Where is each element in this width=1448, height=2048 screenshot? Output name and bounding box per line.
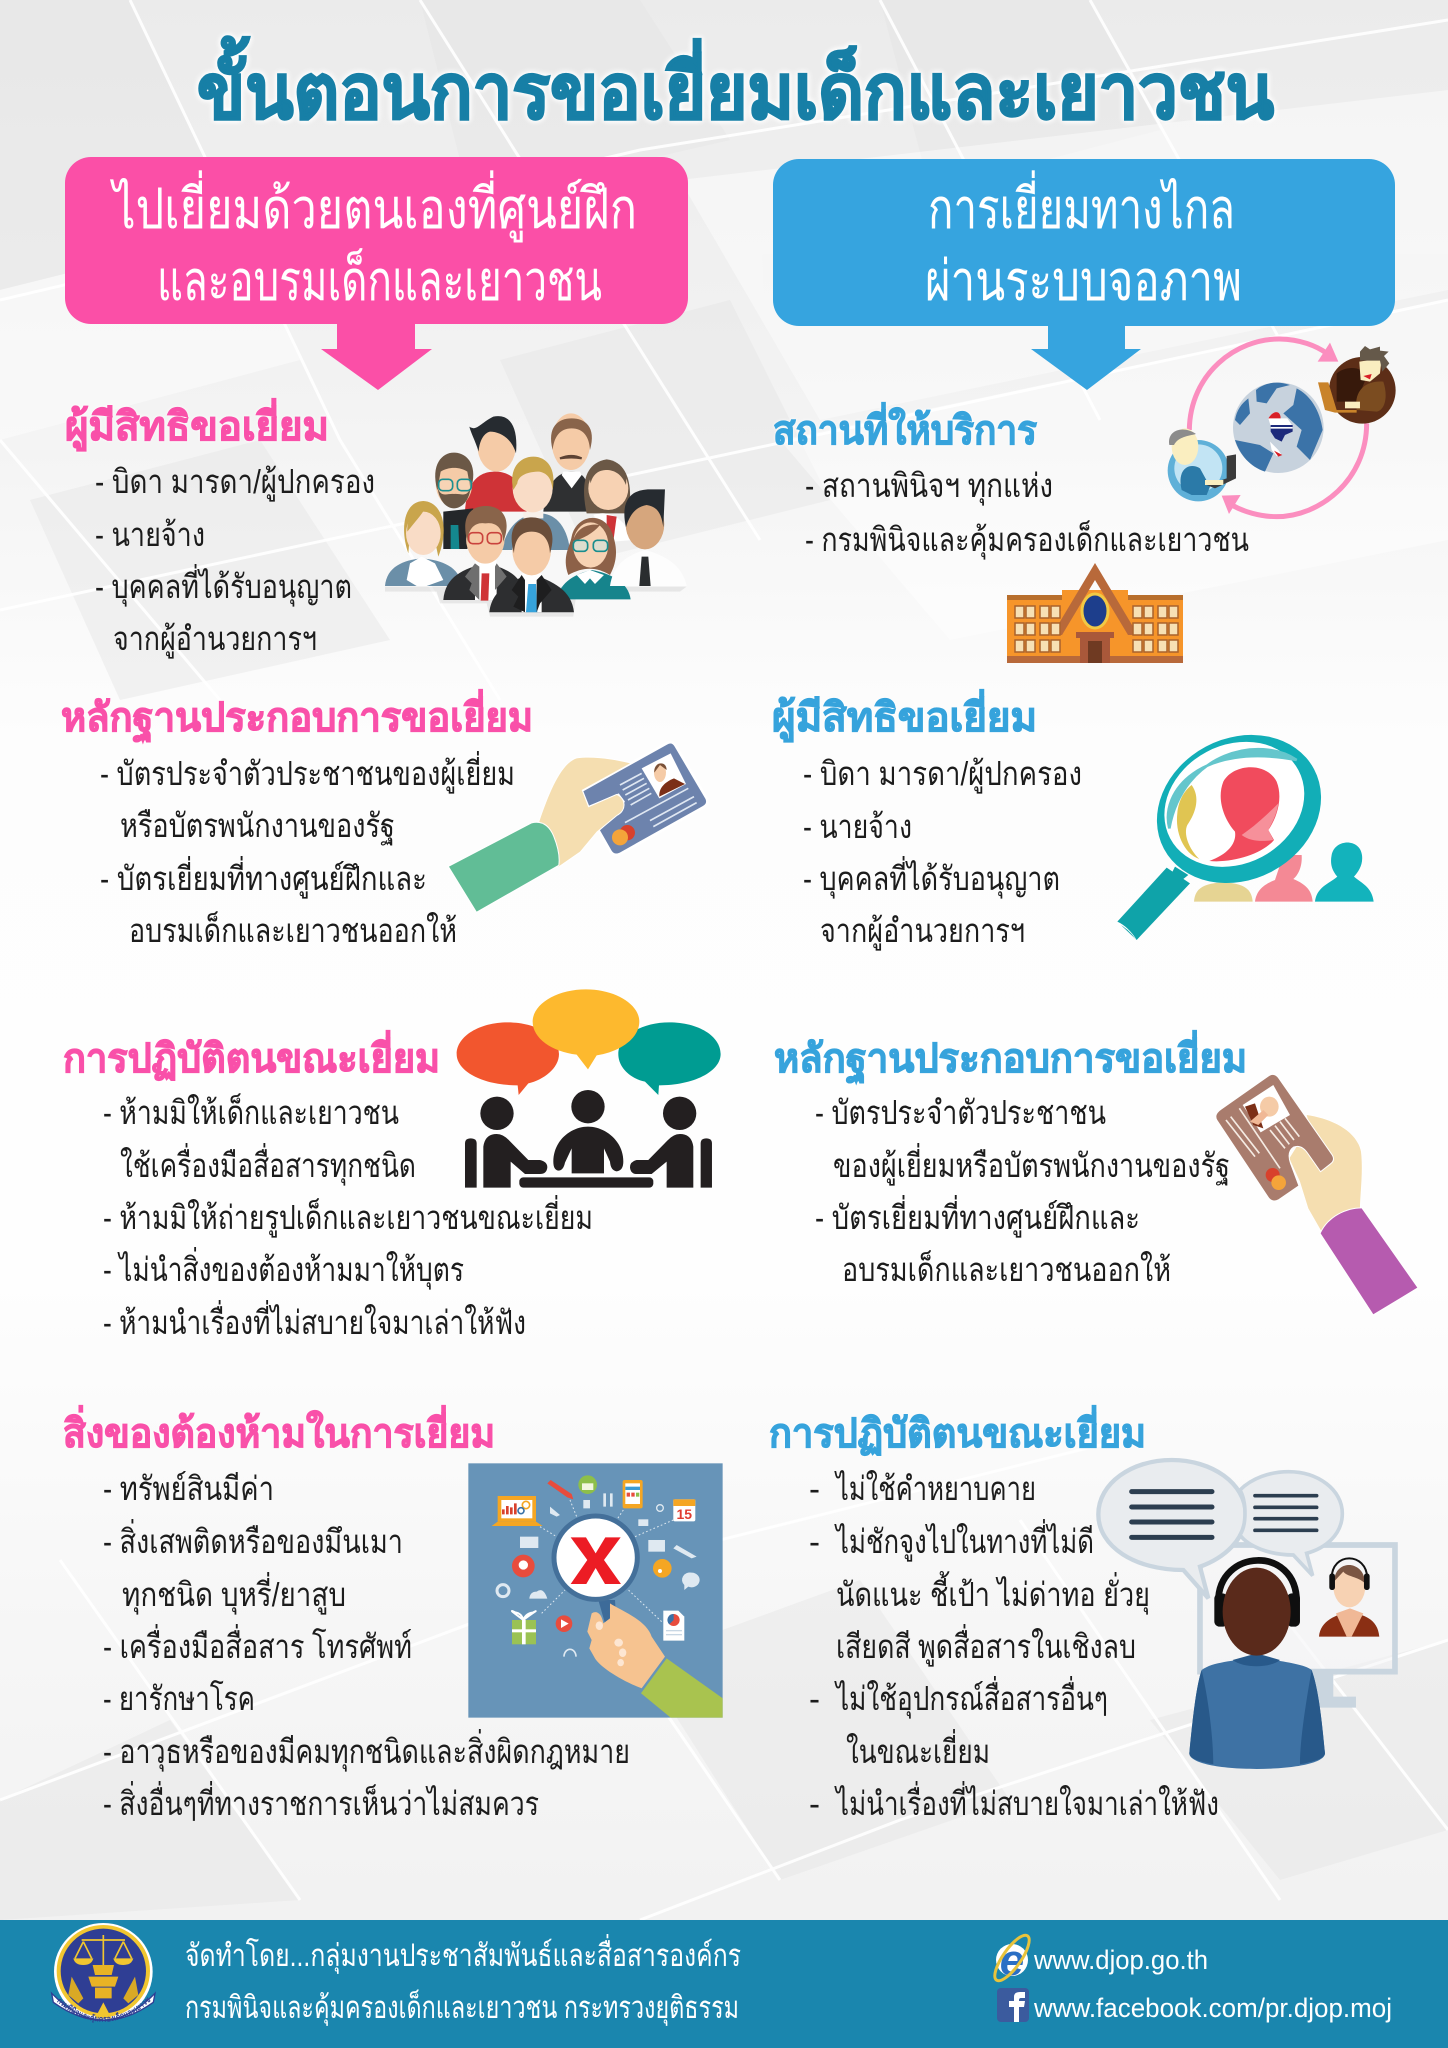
footer organisation text: กรมพินิจและคุ้มครองเด็กและเยาวชน กระทรวงยุติธรรม <box>185 1989 739 2027</box>
title: ขั้นตอนการขอเยี่ยมเด็กและเยาวชน <box>197 36 1274 135</box>
icon: internet <box>989 1931 1035 1985</box>
sleeve <box>449 823 559 912</box>
list: - สิ่งอื่นๆที่ทางราชการเห็นว่าไม่สมควร <box>103 1781 539 1822</box>
icon: group of people <box>385 413 687 617</box>
small icons <box>497 1493 700 1657</box>
heading: หลักฐานประกอบการขอเยี่ยม <box>61 689 533 744</box>
play <box>556 1615 572 1632</box>
list: ไม่ใช้คำหยาบคาย <box>834 1470 1036 1507</box>
section: conduct during visit (in person) <box>63 1030 593 1341</box>
person body <box>1189 1657 1325 1769</box>
icon: building <box>1007 563 1183 663</box>
list: ไม่ใช้อุปกรณ์สื่อสารอื่นๆ <box>834 1676 1108 1719</box>
tablet <box>623 1480 643 1508</box>
list: - บิดา มารดา/ผู้ปกครอง <box>95 463 375 502</box>
basket <box>578 1475 597 1494</box>
blue box text: ผ่านระบบจอภาพ <box>925 249 1242 312</box>
blue box text: การเยี่ยมทางไกล <box>928 170 1235 240</box>
X mark <box>571 1537 621 1584</box>
rss <box>653 1559 672 1578</box>
pink box text: และอบรมเด็กและเยาวชน <box>157 247 602 312</box>
people <box>465 1090 712 1188</box>
blue box with arrow <box>773 159 1395 390</box>
icon: meeting with speech bubbles <box>457 989 721 1188</box>
pencil <box>547 1480 573 1499</box>
head and headset <box>1218 1560 1297 1602</box>
pink box with arrow <box>65 157 688 390</box>
pink arrows <box>1189 339 1367 517</box>
card <box>582 742 707 855</box>
list: - ยารักษาโรค <box>103 1680 255 1717</box>
man right <box>1329 357 1396 424</box>
icon: facebook <box>997 1988 1029 2022</box>
section: eligible visitors (remote) <box>772 689 1082 951</box>
heading: การปฏิบัติตนขณะเยี่ยม <box>63 1030 440 1081</box>
list: เสียดสี พูดสื่อสารในเชิงลบ <box>836 1624 1136 1667</box>
list: - บุคคลที่ได้รับอนุญาต <box>803 856 1060 899</box>
list: จากผู้อำนวยการฯ <box>113 620 317 659</box>
list: - <box>809 1470 820 1507</box>
gift <box>512 1620 536 1644</box>
list: ทุกชนิด บุหรี่/ยาสูบ <box>122 1572 346 1615</box>
icon: magnifier with red X panel: 15 <box>677 1506 692 1522</box>
Thai flag map <box>1268 412 1293 457</box>
list: - บัตรประจำตัวประชาชน <box>815 1094 1106 1131</box>
calendar <box>673 1499 695 1521</box>
list: ในขณะเยี่ยม <box>846 1729 990 1770</box>
list: - นายจ้าง <box>95 516 205 553</box>
list: - นายจ้าง <box>803 808 912 845</box>
dotted connectors <box>540 1500 673 1622</box>
list: ใช้เครื่องมือสื่อสารทุกชนิด <box>120 1143 416 1186</box>
list <box>805 467 1249 560</box>
globe <box>1233 382 1324 473</box>
logo: กรมพินิจและคุ้มครองเด็กและเยาวชน <box>57 1997 151 2023</box>
icon: video link globe <box>1168 339 1396 517</box>
list: อบรมเด็กและเยาวชนออกให้ <box>129 911 457 949</box>
list: - อาวุธหรือของมีคมทุกชนิดและสิ่งผิดกฎหมาย <box>103 1729 630 1772</box>
list: อบรมเด็กและเยาวชนออกให้ <box>842 1250 1171 1288</box>
panel: remote visit header <box>773 159 1395 390</box>
footer organisation text: จัดทำโดย...กลุ่มงานประชาสัมพันธ์และสื่อสารองค์กร <box>185 1934 741 1975</box>
footer organisation text <box>185 1934 741 2027</box>
list <box>815 1094 1230 1288</box>
heading: สถานที่ให้บริการ <box>773 402 1037 453</box>
hand <box>539 758 630 867</box>
big speech bubble <box>1098 1460 1246 1598</box>
section: conduct during visit (remote) <box>769 1405 1219 1822</box>
list: จากผู้อำนวยการฯ <box>820 912 1025 951</box>
facebook page: www.facebook.com/pr.djop.moj <box>1033 1993 1392 2023</box>
handle <box>1117 868 1190 940</box>
list: - ห้ามนำเรื่องที่ไม่สบายใจมาเล่าให้ฟัง <box>103 1300 526 1341</box>
list: - <box>809 1523 820 1560</box>
icon: hand holding card, purple sleeve <box>1216 1075 1417 1314</box>
list <box>809 1470 1219 1822</box>
section: eligible visitors (in person) <box>65 398 375 659</box>
hand <box>1289 1115 1362 1232</box>
heading: ผู้มีสิทธิขอเยี่ยม <box>65 398 329 451</box>
heading: หลักฐานประกอบการขอเยี่ยม <box>774 1030 1247 1085</box>
yellow bubble <box>533 989 639 1069</box>
list: ไม่นำเรื่องที่ไม่สบายใจมาเล่าให้ฟัง <box>834 1781 1219 1822</box>
magnifier <box>598 1600 617 1635</box>
blue box text <box>925 170 1242 312</box>
list: - บิดา มารดา/ผู้ปกครอง <box>803 755 1082 794</box>
list <box>100 751 515 949</box>
list: - ห้ามมิให้ถ่ายรูปเด็กและเยาวชนขณะเยี่ยม <box>103 1195 593 1238</box>
list <box>103 1470 630 1822</box>
website: www.djop.go.th <box>1033 1945 1208 1975</box>
teal bubble <box>618 1022 721 1095</box>
icon: video call with headset <box>1098 1460 1395 1769</box>
footer <box>0 1920 1448 2048</box>
list <box>95 463 375 659</box>
monitor <box>1200 1545 1395 1672</box>
icon: magnifier over people <box>1117 707 1374 940</box>
heading: การปฏิบัติตนขณะเยี่ยม <box>769 1405 1146 1456</box>
section: required documents (remote) <box>774 1030 1247 1288</box>
panel: in-person visit header <box>65 157 688 390</box>
section: service locations <box>773 402 1249 560</box>
heading: สิ่งของต้องห้ามในการเยี่ยม <box>63 1405 495 1456</box>
list: - บัตรเยี่ยมที่ทางศูนย์ฝึกและ <box>100 856 427 899</box>
icon: magnifier with red X panel <box>468 1463 723 1718</box>
document <box>663 1611 684 1641</box>
list: - สิ่งเสพติดหรือของมึนเมา <box>103 1519 403 1560</box>
people silhouettes <box>1194 882 1253 902</box>
list: - <box>809 1680 820 1717</box>
lens figures <box>1177 785 1199 859</box>
icon: internet: e <box>1000 1936 1024 1985</box>
small speech bubble <box>1240 1472 1342 1576</box>
list: ของผู้เยี่ยมหรือบัตรพนักงานของรัฐ <box>833 1143 1230 1186</box>
list: - เครื่องมือสื่อสาร โทรศัพท์ <box>103 1624 412 1665</box>
list: - ทรัพย์สินมีค่า <box>103 1470 274 1507</box>
icon: hand holding card, green sleeve <box>449 742 707 912</box>
orange bubble <box>457 1022 559 1095</box>
card <box>1216 1075 1333 1200</box>
laptop <box>492 1496 543 1526</box>
bulb icon <box>512 1555 535 1577</box>
list: - <box>809 1785 820 1822</box>
list: - กรมพินิจและคุ้มครองเด็กและเยาวชน <box>805 520 1249 560</box>
heading: ผู้มีสิทธิขอเยี่ยม <box>772 689 1037 742</box>
remote woman <box>1319 1612 1379 1637</box>
pink box text <box>110 170 637 312</box>
list: นัดแนะ ชี้เป้า ไม่ด่าทอ ยั่วยุ <box>836 1571 1150 1615</box>
list: - บัตรเยี่ยมที่ทางศูนย์ฝึกและ <box>815 1195 1140 1238</box>
list: - ไม่นำสิ่งของต้องห้ามมาให้บุตร <box>103 1247 464 1290</box>
hand <box>587 1603 665 1688</box>
section: prohibited items <box>63 1405 630 1822</box>
pink box text: ไปเยี่ยมด้วยตนเองที่ศูนย์ฝึก <box>110 170 637 243</box>
list: หรือบัตรพนักงานของรัฐ <box>120 807 395 846</box>
list: - บัตรประจำตัวประชาชนของผู้เยี่ยม <box>100 751 515 794</box>
section: required documents (in person) <box>61 689 533 949</box>
list: - บุคคลที่ได้รับอนุญาต <box>95 564 352 607</box>
list <box>103 1093 593 1341</box>
list: - สถานพินิจฯ ทุกแห่ง <box>805 467 1053 506</box>
sleeve <box>641 1658 723 1718</box>
list: - ห้ามมิให้เด็กและเยาวชน <box>103 1093 399 1131</box>
ring <box>1131 707 1347 911</box>
list <box>803 755 1082 951</box>
sleeve <box>1321 1208 1417 1314</box>
man left <box>1168 440 1229 501</box>
list: ไม่ชักจูงไปในทางที่ไม่ดี <box>834 1519 1094 1562</box>
